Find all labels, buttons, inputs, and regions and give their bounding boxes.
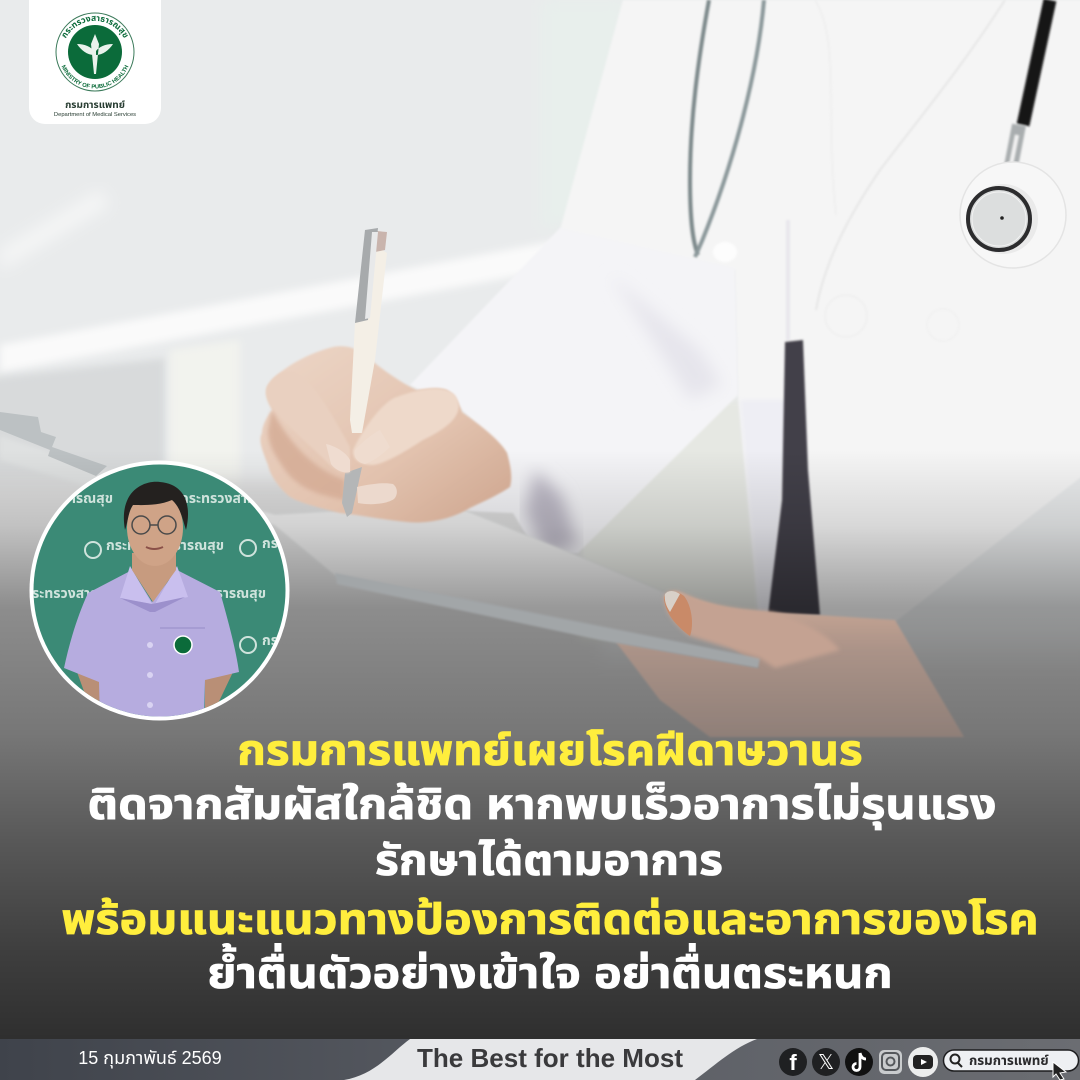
slogan: The Best for the Most xyxy=(417,1043,683,1073)
stethoscope tubing xyxy=(690,0,1050,262)
thumb nail xyxy=(664,592,692,636)
icon: tiktok xyxy=(845,1048,873,1076)
writing hand xyxy=(260,228,511,522)
finger shadow xyxy=(268,410,345,500)
Ministry of Public Health seal: MINISTRY OF PUBLIC HEALTH xyxy=(62,64,128,88)
dark shirt gap xyxy=(768,340,820,615)
arms xyxy=(78,674,232,708)
portrait in circle xyxy=(25,460,295,730)
logo card: Department of Medical Services xyxy=(54,112,136,118)
pen xyxy=(342,228,387,517)
glasses xyxy=(132,516,176,534)
shirt pocket and buttons xyxy=(160,627,205,629)
Ministry of Public Health seal xyxy=(56,12,134,92)
headline line 1: กรมการแพทย์เผยโรคฝีดาษวานร xyxy=(237,727,862,775)
backdrop logos and text: กระ xyxy=(262,535,283,551)
backdrop logos and text: ระทรวงสาธา xyxy=(32,585,104,601)
clipboard metal clip xyxy=(0,412,107,476)
backdrop logos and text: ธารณสุข xyxy=(62,490,113,507)
headline line 3: รักษาได้ตามอาการ xyxy=(375,837,723,885)
backdrop logos and text: ธารณสุข xyxy=(215,585,266,602)
search pill xyxy=(944,1050,1078,1080)
finger nail below pen xyxy=(357,483,397,504)
icon: X: 𝕏 xyxy=(818,1050,834,1074)
shirt xyxy=(64,570,239,722)
clipboard edge xyxy=(335,573,760,668)
headline line 2: ติดจากสัมผัสใกล้ชิด หากพบเร็วอาการไม่รุนแรง xyxy=(88,781,996,829)
thumb xyxy=(664,591,840,668)
neck and head xyxy=(132,553,176,602)
coat lapel and seam lines xyxy=(788,0,1005,341)
bottom bar xyxy=(0,1039,1080,1080)
icon: youtube xyxy=(908,1047,938,1077)
icon: facebook xyxy=(779,1048,807,1076)
headline line 5: ย้ำตื่นตัวอย่างเข้าใจ อย่าตื่นตระหนก xyxy=(207,950,892,998)
sleeve xyxy=(410,228,738,558)
logo card xyxy=(29,0,161,124)
stethoscope chestpiece xyxy=(960,162,1066,268)
headline line 4: พร้อมแนะแนวทางป้องการติดต่อและอาการของโรค xyxy=(61,896,1039,944)
thumb of writing hand xyxy=(353,389,459,465)
logo card: กรมการแพทย์ xyxy=(65,100,125,111)
shirt badge xyxy=(174,636,192,654)
icon: X xyxy=(812,1048,840,1076)
index finger xyxy=(266,371,350,473)
backdrop logos and text: กระ xyxy=(262,632,283,648)
icon: facebook: f xyxy=(789,1050,797,1075)
search pill: กรมการแพทย์ xyxy=(969,1053,1049,1068)
dark gradient overlay xyxy=(0,450,1080,1080)
white lab coat xyxy=(410,0,1080,630)
clipboard sheet xyxy=(0,436,765,660)
icon: cursor xyxy=(1053,1062,1066,1080)
backdrop logos and text xyxy=(32,490,283,653)
backdrop logos and text: กระทรวงสาธารณสุข xyxy=(106,537,224,554)
backdrop logos and text: กระทรวงสาธารณ xyxy=(180,490,281,506)
Ministry of Public Health seal: กระทรวงสาธารณสุข xyxy=(62,16,128,38)
date: 15 กุมภาพันธ์ 2569 xyxy=(78,1048,222,1069)
lower hand holding clipboard xyxy=(335,573,964,737)
icon: instagram xyxy=(879,1050,902,1074)
